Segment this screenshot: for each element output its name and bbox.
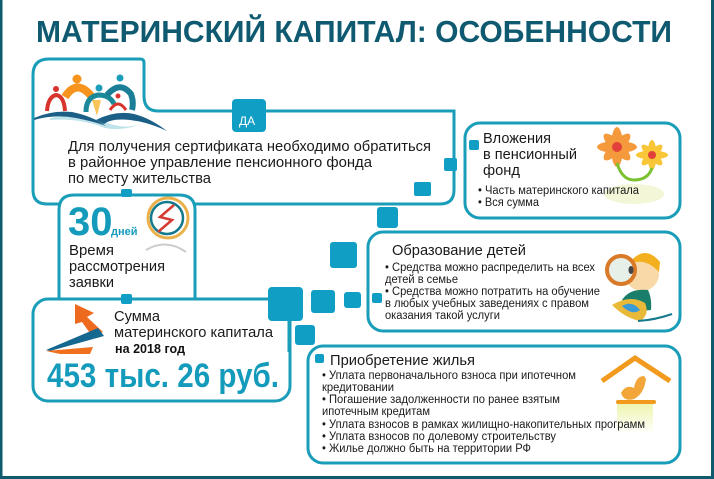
text: certificate: Для получения сертификата необходимо обратиться [68,139,431,155]
list: housing: • Уплата взносов в рамках жилищно-накопительных программ [322,419,645,431]
heading: pension fund [483,130,577,179]
list: education [385,262,600,322]
heading: 30 days: дней [111,226,138,238]
list: housing: • Погашение задолженности по ранее взятым [322,394,560,406]
text: amount label: на 2018 год [115,342,185,356]
text: review time: заявки [69,275,114,291]
heading: 30 days: 30 [68,200,112,244]
list: pension fund: • Часть материнского капитала [478,185,640,197]
list: pension fund: • Вся сумма [478,197,540,209]
list: pension fund [478,185,640,209]
text: certificate [68,139,431,187]
panel: housing [308,346,680,463]
panel: amount [33,299,290,401]
icon: birdhouse [602,358,670,434]
title: МАТЕРИНСКИЙ КАПИТАЛ: ОСОБЕННОСТИ [36,13,672,49]
text: review time [69,243,165,291]
badge: ДА: ДА [239,114,255,128]
text: review time: Время [69,243,114,259]
icon: clock [146,198,188,252]
list: housing [322,370,645,455]
list: housing: кредитовании [322,382,394,394]
icon: arrow logo [46,304,104,354]
heading: pension fund: в пенсионный [483,146,577,163]
text: amount label [114,309,274,356]
list: education: в любых учебных заведениях с правом [385,298,589,310]
icon: flowers [597,127,668,204]
icon: child with magnifier [607,253,672,321]
list: housing: ипотечным кредитам [322,406,430,418]
text: certificate: в районное управление пенсионного фонда [68,155,373,171]
connector line [288,320,290,352]
list: education: • Средства можно распределить на всех [385,262,595,274]
text: amount label: Сумма [114,309,161,325]
decorative squares [121,140,479,363]
panel: education [368,232,680,331]
icon: family [34,74,167,131]
list: housing: • Жилье должно быть на территории РФ [322,443,531,455]
heading: pension fund: Вложения [483,130,551,147]
list: education: оказания такой услуги [385,310,500,322]
text: certificate: по месту жительства [68,171,212,187]
amount value: 453 тыс. 26 руб. [47,357,279,395]
heading: education: Образование детей [392,242,526,259]
heading: 30 days [68,200,138,244]
panel: 30 days [59,195,195,299]
panel: pension fund [465,123,680,218]
list: housing: • Уплата взносов по долевому строительству [322,431,556,443]
list: education: детей в семье [385,274,458,286]
list: education: • Средства можно потратить на обучение [385,286,600,298]
text: amount label: материнского капитала [114,325,274,341]
heading: housing: Приобретение жилья [330,352,475,369]
panel: certificate [33,59,454,204]
list: housing: • Уплата первоначального взноса при ипотечном [322,370,576,382]
heading: pension fund: фонд [483,162,520,179]
badge: ДА [232,99,266,132]
text: review time: рассмотрения [69,259,165,275]
